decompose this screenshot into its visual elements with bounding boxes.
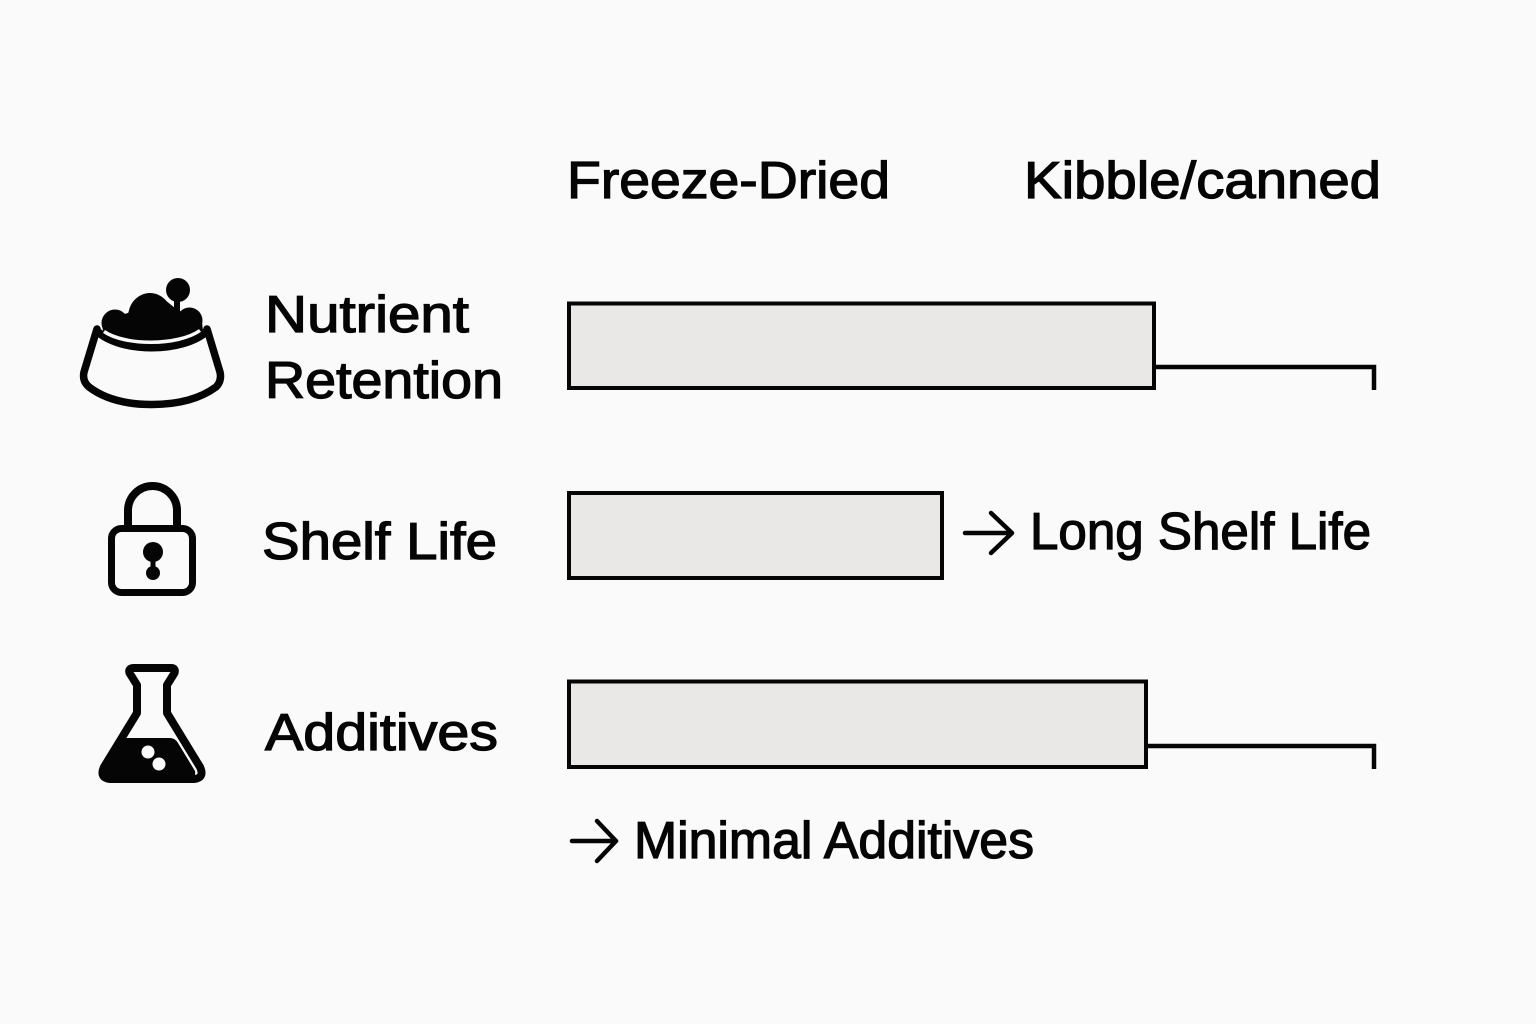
column heading: Kibble/canned: Kibble/canned	[1024, 152, 1381, 210]
bar: Freeze-Dried additives	[569, 682, 1146, 767]
label: Additives: Additives	[265, 704, 498, 762]
row: Additives	[102, 668, 1374, 870]
row: Nutrient Retention	[84, 278, 1374, 410]
row: Shelf Life	[112, 486, 1371, 592]
bar: Freeze-Dried nutrient retention	[569, 304, 1154, 388]
icon: flask	[102, 668, 202, 779]
label: Retention: Retention	[265, 352, 503, 410]
bar: Kibble/canned nutrient retention bracket	[1155, 367, 1374, 390]
label: Shelf Life: Shelf Life	[262, 513, 497, 571]
column heading: Freeze-Dried: Freeze-Dried	[567, 152, 890, 210]
icon: padlock	[112, 486, 192, 592]
bar: Freeze-Dried shelf life	[569, 493, 942, 578]
callout: Minimal Additives: Minimal Additives	[634, 812, 1034, 870]
callout: Long Shelf Life: Long Shelf Life	[1030, 503, 1371, 561]
icon: food bowl	[84, 278, 220, 404]
bar: Kibble/canned additives bracket	[1147, 746, 1374, 769]
arrow: to long shelf life	[965, 513, 1012, 553]
label: Nutrient: Nutrient	[265, 286, 470, 344]
arrow: to minimal additives	[572, 821, 616, 861]
